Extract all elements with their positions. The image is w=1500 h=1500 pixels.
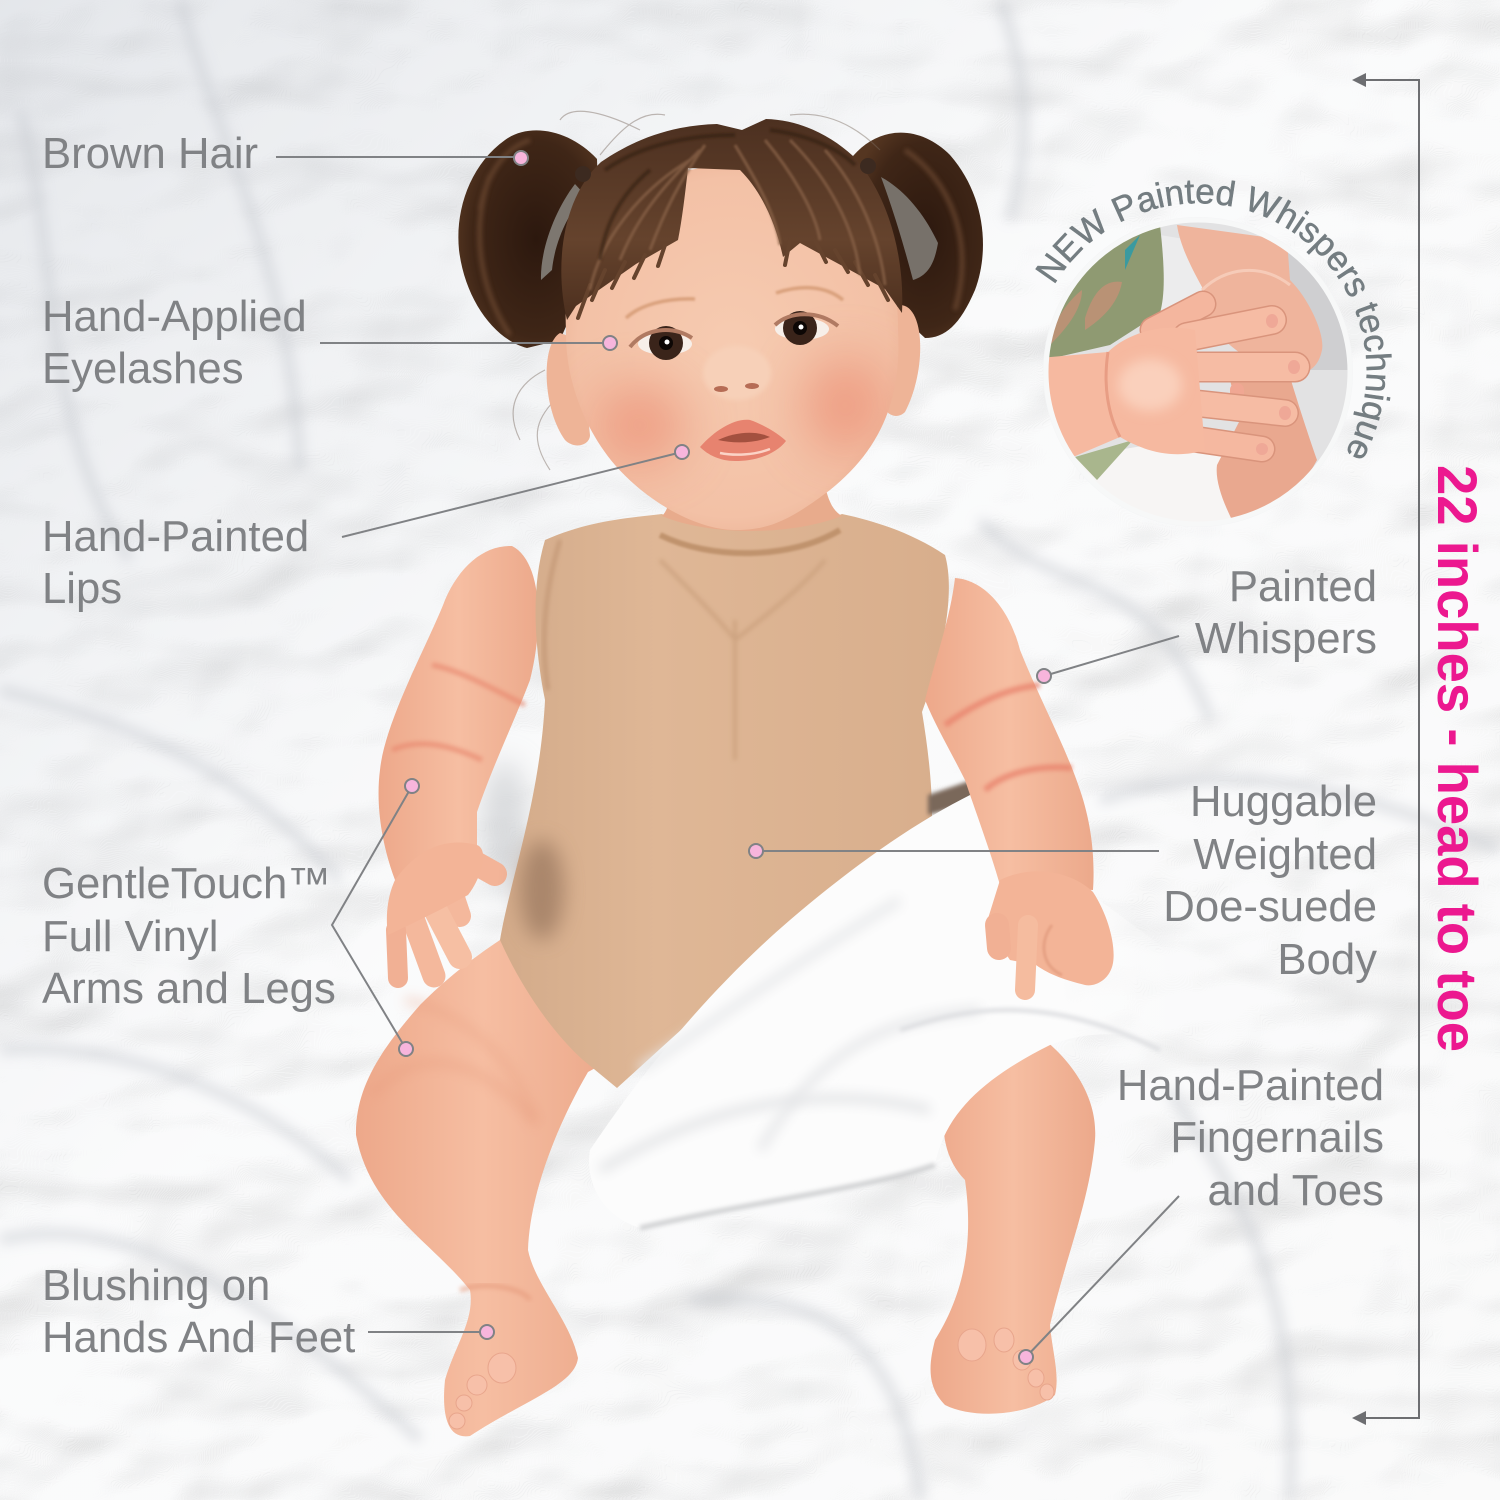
doll: suede body [500, 514, 949, 1088]
callout: Painted Whispers [1037, 562, 1377, 683]
callout: Hand-Painted Fingernails and Toes [1019, 1061, 1384, 1364]
doll: right arm and hand [925, 578, 1114, 990]
callout: GentleTouch Full Vinyl Arms and Legs: GentleTouch™ [42, 859, 331, 908]
inset: forearm and upper hand [1177, 225, 1322, 373]
doll: hair buns [458, 130, 983, 348]
doll: flyaway hair wisps [513, 111, 880, 470]
doll: dark gap behind blanket [928, 780, 985, 815]
doll: eyebrows [626, 288, 843, 318]
inset: lower leg [1216, 382, 1317, 518]
doll: cheek blush [595, 357, 887, 465]
callout: Huggable Weighted Doe-suede Body: Weighted [1193, 830, 1377, 879]
callout: Hand-Painted Lips [42, 445, 689, 613]
callout: Hand-Painted Lips: Lips [42, 564, 122, 613]
callout: Hand-Painted Fingernails and Toes: Fingernails [1170, 1113, 1384, 1162]
height label: 22 inches - head to toe [1426, 465, 1489, 1052]
doll: left arm and hand [379, 546, 538, 978]
callout: Hand-Painted Lips: Hand-Painted [42, 512, 309, 561]
callout: Blushing on Hands And Feet: Hands And Feet [42, 1313, 355, 1362]
callout: Huggable Weighted Doe-suede Body: Body [1277, 935, 1377, 984]
callout: Hand-Painted Fingernails and Toes: and Toes [1207, 1166, 1384, 1215]
doll: right leg [931, 1040, 1095, 1414]
doll: fringe hair [561, 119, 902, 320]
callout: Hand-Applied Eyelashes: Eyelashes [42, 344, 244, 393]
doll: left leg [356, 930, 610, 1436]
doll: neck [662, 490, 842, 531]
callout: Blushing on Hands And Feet [42, 1261, 494, 1362]
callout: Painted Whispers: Whispers [1195, 614, 1377, 663]
callout: GentleTouch Full Vinyl Arms and Legs: Full Vinyl [42, 912, 218, 961]
callout: Huggable Weighted Doe-suede Body: Doe-suede [1163, 882, 1377, 931]
doll: head [566, 165, 898, 530]
doll: nose [703, 346, 771, 400]
doll: lips [700, 420, 786, 461]
doll: white blanket [589, 794, 1180, 1228]
callout: GentleTouch Full Vinyl Arms and Legs: Arms and Legs [42, 964, 336, 1013]
height bracket arrow [1352, 73, 1419, 1425]
inset: lower hand and fingers [1153, 304, 1295, 449]
callout: Brown Hair [42, 129, 528, 178]
callout: Hand-Applied Eyelashes: Hand-Applied [42, 292, 307, 341]
inset caption: curved text: NEW Painted Whispers technique [1035, 180, 1392, 458]
callout: Huggable Weighted Doe-suede Body: Huggable [1190, 777, 1377, 826]
callout: Brown Hair: Brown Hair [42, 129, 258, 178]
callout: Painted Whispers: Painted [1229, 562, 1377, 611]
inset circle: Painted Whispers hand close-up [1044, 222, 1351, 518]
inset: green shirt [1049, 227, 1164, 358]
callout: Blushing on Hands And Feet: Blushing on [42, 1261, 270, 1310]
callout: Hand-Painted Fingernails and Toes: Hand-Painted [1117, 1061, 1384, 1110]
callout: GentleTouch Full Vinyl Arms and Legs [42, 779, 419, 1056]
doll: eyes [630, 311, 838, 360]
doll: ears [547, 305, 920, 445]
callout: Huggable Weighted Doe-suede Body [749, 777, 1377, 984]
callout: Hand-Applied Eyelashes [42, 292, 617, 393]
doll [356, 111, 1180, 1436]
